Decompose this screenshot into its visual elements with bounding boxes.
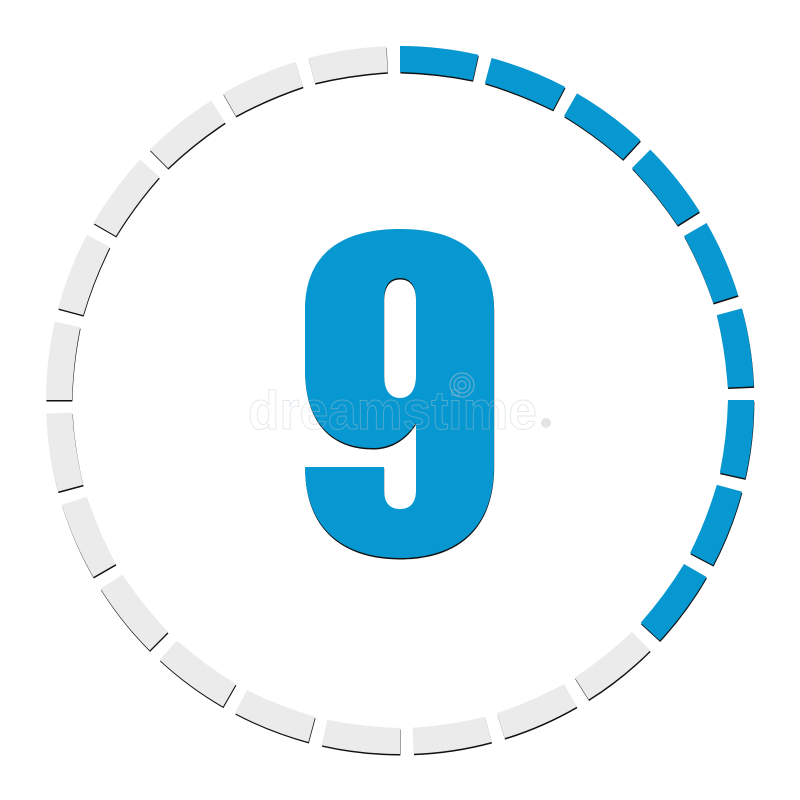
watermark xyxy=(248,373,551,441)
gray segment 10 xyxy=(571,626,651,707)
blue segment 1 xyxy=(400,46,479,82)
gray segment 17 xyxy=(54,492,123,578)
gray segment 18 xyxy=(38,407,91,493)
gray segment 12 xyxy=(407,709,492,764)
blue segment 9 xyxy=(638,560,707,646)
large numeral 9 drawn as the central shape xyxy=(305,229,494,560)
blue segment 7 xyxy=(720,400,754,480)
gray segment 20 xyxy=(58,233,112,319)
blue segment 2 xyxy=(483,58,568,113)
watermark wordmark: dreamstime xyxy=(248,381,537,441)
blue segment 3 xyxy=(560,93,645,164)
gray segment 15 xyxy=(155,638,240,708)
gray segment 16 xyxy=(94,571,174,652)
blue segment 4 xyxy=(626,150,706,231)
watermark spiral icon xyxy=(450,373,474,397)
blue segment 5 xyxy=(677,223,746,309)
watermark dot xyxy=(541,418,551,428)
gray segment 19 xyxy=(46,322,81,402)
gray segment 14 xyxy=(233,689,318,743)
gray segment 24 xyxy=(308,38,393,93)
gray segment 23 xyxy=(223,54,308,125)
blue segment 6 xyxy=(709,308,763,394)
blue segment 8 xyxy=(689,483,742,569)
gray segment 22 xyxy=(150,94,230,175)
gray segment 13 xyxy=(322,720,400,756)
gray segment 21 xyxy=(93,155,163,242)
gray segment 11 xyxy=(492,677,577,747)
